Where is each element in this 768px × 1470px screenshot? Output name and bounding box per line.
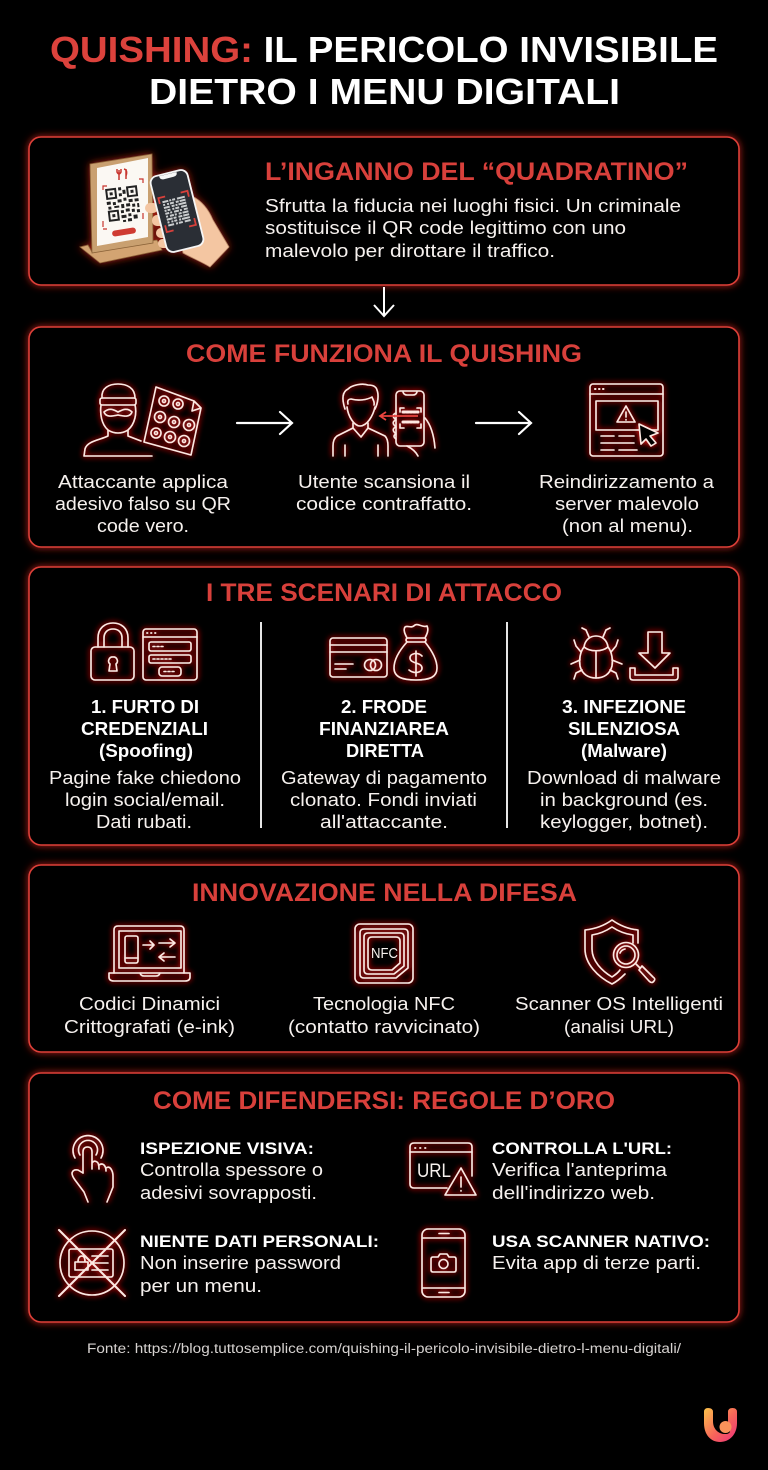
step texts: adesivo falso su QR	[55, 493, 231, 514]
scenario 2	[281, 696, 487, 832]
defence texts: Crittografati (e-ink)	[64, 1016, 235, 1037]
scenario 1: login social/email.	[65, 789, 225, 810]
scenario 1: Dati rubati.	[96, 811, 192, 832]
heading: L’INGANNO DEL “QUADRATINO”	[265, 158, 688, 186]
defence texts: (contatto ravvicinato)	[288, 1016, 480, 1037]
step texts: Attaccante applica	[58, 471, 229, 492]
text block: sostituisce il QR code legittimo con uno	[265, 217, 626, 238]
tip 1: adesivi sovrapposti.	[140, 1182, 317, 1203]
icon: bug and download	[571, 628, 678, 680]
dividers	[261, 622, 507, 828]
icon: NFC tag	[355, 924, 413, 983]
heading: COME DIFENDERSI: REGOLE D’ORO	[153, 1087, 615, 1115]
tip 3: per un menu.	[140, 1275, 262, 1296]
scenario 3: SILENZIOSA	[568, 718, 680, 739]
tip 2: Verifica l'anteprima	[492, 1159, 668, 1180]
scenario 3: Download di malware	[527, 767, 721, 788]
scenario 2: DIRETTA	[346, 740, 424, 761]
icon: red scan arrow	[380, 412, 418, 420]
icon: phone camera	[422, 1229, 465, 1297]
icon: URL warning	[410, 1143, 476, 1195]
step texts: Reindirizzamento a	[539, 471, 715, 492]
scenario 1: CREDENZIALI	[81, 718, 208, 739]
defence texts: Codici Dinamici	[79, 993, 220, 1014]
tip 4	[492, 1232, 710, 1273]
panel: l'inganno del quadratino	[29, 137, 739, 285]
icon: malicious browser window	[590, 384, 663, 456]
icon: shield with magnifier	[585, 920, 655, 984]
heading: INNOVAZIONE NELLA DIFESA	[192, 879, 577, 907]
icon: credit card and money bag	[330, 625, 437, 680]
tip 1: ISPEZIONE VISIVA:	[140, 1139, 314, 1158]
text block	[265, 195, 681, 261]
tip 2: CONTROLLA L'URL:	[492, 1139, 672, 1158]
source line: Fonte: https://blog.tuttosemplice.com/quishing-il-pericolo-invisibile-dietro-l-menu-digitali/	[87, 1341, 681, 1356]
title: QUISHING: IL PERICOLO INVISIBILE	[50, 29, 718, 70]
text block: malevolo per dirottare il traffico.	[265, 240, 555, 261]
icon: padlock and login form	[91, 623, 197, 680]
step texts: Utente scansiona il	[298, 471, 470, 492]
panel: i tre scenari	[29, 567, 739, 845]
scenario 2: FINANZIAREA	[319, 718, 449, 739]
scenario 2: all'attaccante.	[320, 811, 448, 832]
scenario 1: (Spoofing)	[99, 740, 193, 761]
tip 3	[140, 1232, 379, 1296]
title	[50, 29, 718, 112]
defence texts: Tecnologia NFC	[313, 993, 455, 1014]
tip 1	[140, 1139, 323, 1203]
arrow: down	[374, 287, 394, 316]
arrow	[476, 412, 531, 434]
panel: regole d'oro	[29, 1073, 739, 1322]
icon: laptop with dynamic code	[109, 926, 190, 981]
heading: COME FUNZIONA IL QUISHING	[186, 340, 582, 368]
tip 4: Evita app di terze parti.	[492, 1252, 701, 1273]
step texts: code vero.	[97, 515, 189, 536]
title: DIETRO I MENU DIGITALI	[149, 71, 620, 112]
scenario 1: 1. FURTO DI	[91, 696, 199, 717]
icon: user scanning code	[333, 384, 435, 456]
tip 2: dell'indirizzo web.	[492, 1182, 655, 1203]
scenario 3: in background (es.	[540, 789, 708, 810]
scenario 2: 2. FRODE	[341, 696, 427, 717]
tip 3: Non inserire password	[140, 1252, 341, 1273]
scenario 1: Pagine fake chiedono	[49, 767, 241, 788]
step texts	[55, 471, 715, 536]
logo	[704, 1408, 737, 1442]
icon: URL warning: URL	[417, 1161, 451, 1182]
scenario 1	[49, 696, 241, 832]
tip 2	[492, 1139, 672, 1203]
tip 1: Controlla spessore o	[140, 1159, 323, 1180]
scenario 3	[527, 696, 721, 832]
tip 4: USA SCANNER NATIVO:	[492, 1232, 710, 1251]
text block: Sfrutta la fiducia nei luoghi fisici. Un criminale	[265, 195, 681, 216]
panel: come funziona	[29, 327, 739, 547]
step texts: (non al menu).	[562, 515, 693, 536]
arrow	[237, 412, 292, 434]
icon: attacker with sticker sheet	[84, 384, 201, 456]
icon: no personal data	[59, 1230, 125, 1296]
icon: printed QR code	[105, 185, 141, 224]
illustration: menu stand and phone scanning QR code	[80, 154, 229, 267]
step texts: codice contraffatto.	[296, 493, 472, 514]
tip 3: NIENTE DATI PERSONALI:	[140, 1232, 379, 1251]
defence texts	[64, 993, 723, 1037]
scenario 3: 3. INFEZIONE	[562, 696, 686, 717]
defence texts: (analisi URL)	[564, 1016, 674, 1037]
scenario 3: keylogger, botnet).	[540, 811, 708, 832]
defence texts: Scanner OS Intelligenti	[515, 993, 723, 1014]
icon: NFC tag: NFC	[371, 946, 398, 962]
scenario 3: (Malware)	[581, 740, 667, 761]
icon: touching hand	[72, 1136, 113, 1202]
step texts: server malevolo	[555, 493, 699, 514]
scenario 2: Gateway di pagamento	[281, 767, 487, 788]
scenario 2: clonato. Fondi inviati	[290, 789, 477, 810]
icon: phone with QR on screen	[149, 169, 205, 253]
heading: I TRE SCENARI DI ATTACCO	[206, 579, 562, 607]
panel: innovazione nella difesa	[29, 865, 739, 1052]
